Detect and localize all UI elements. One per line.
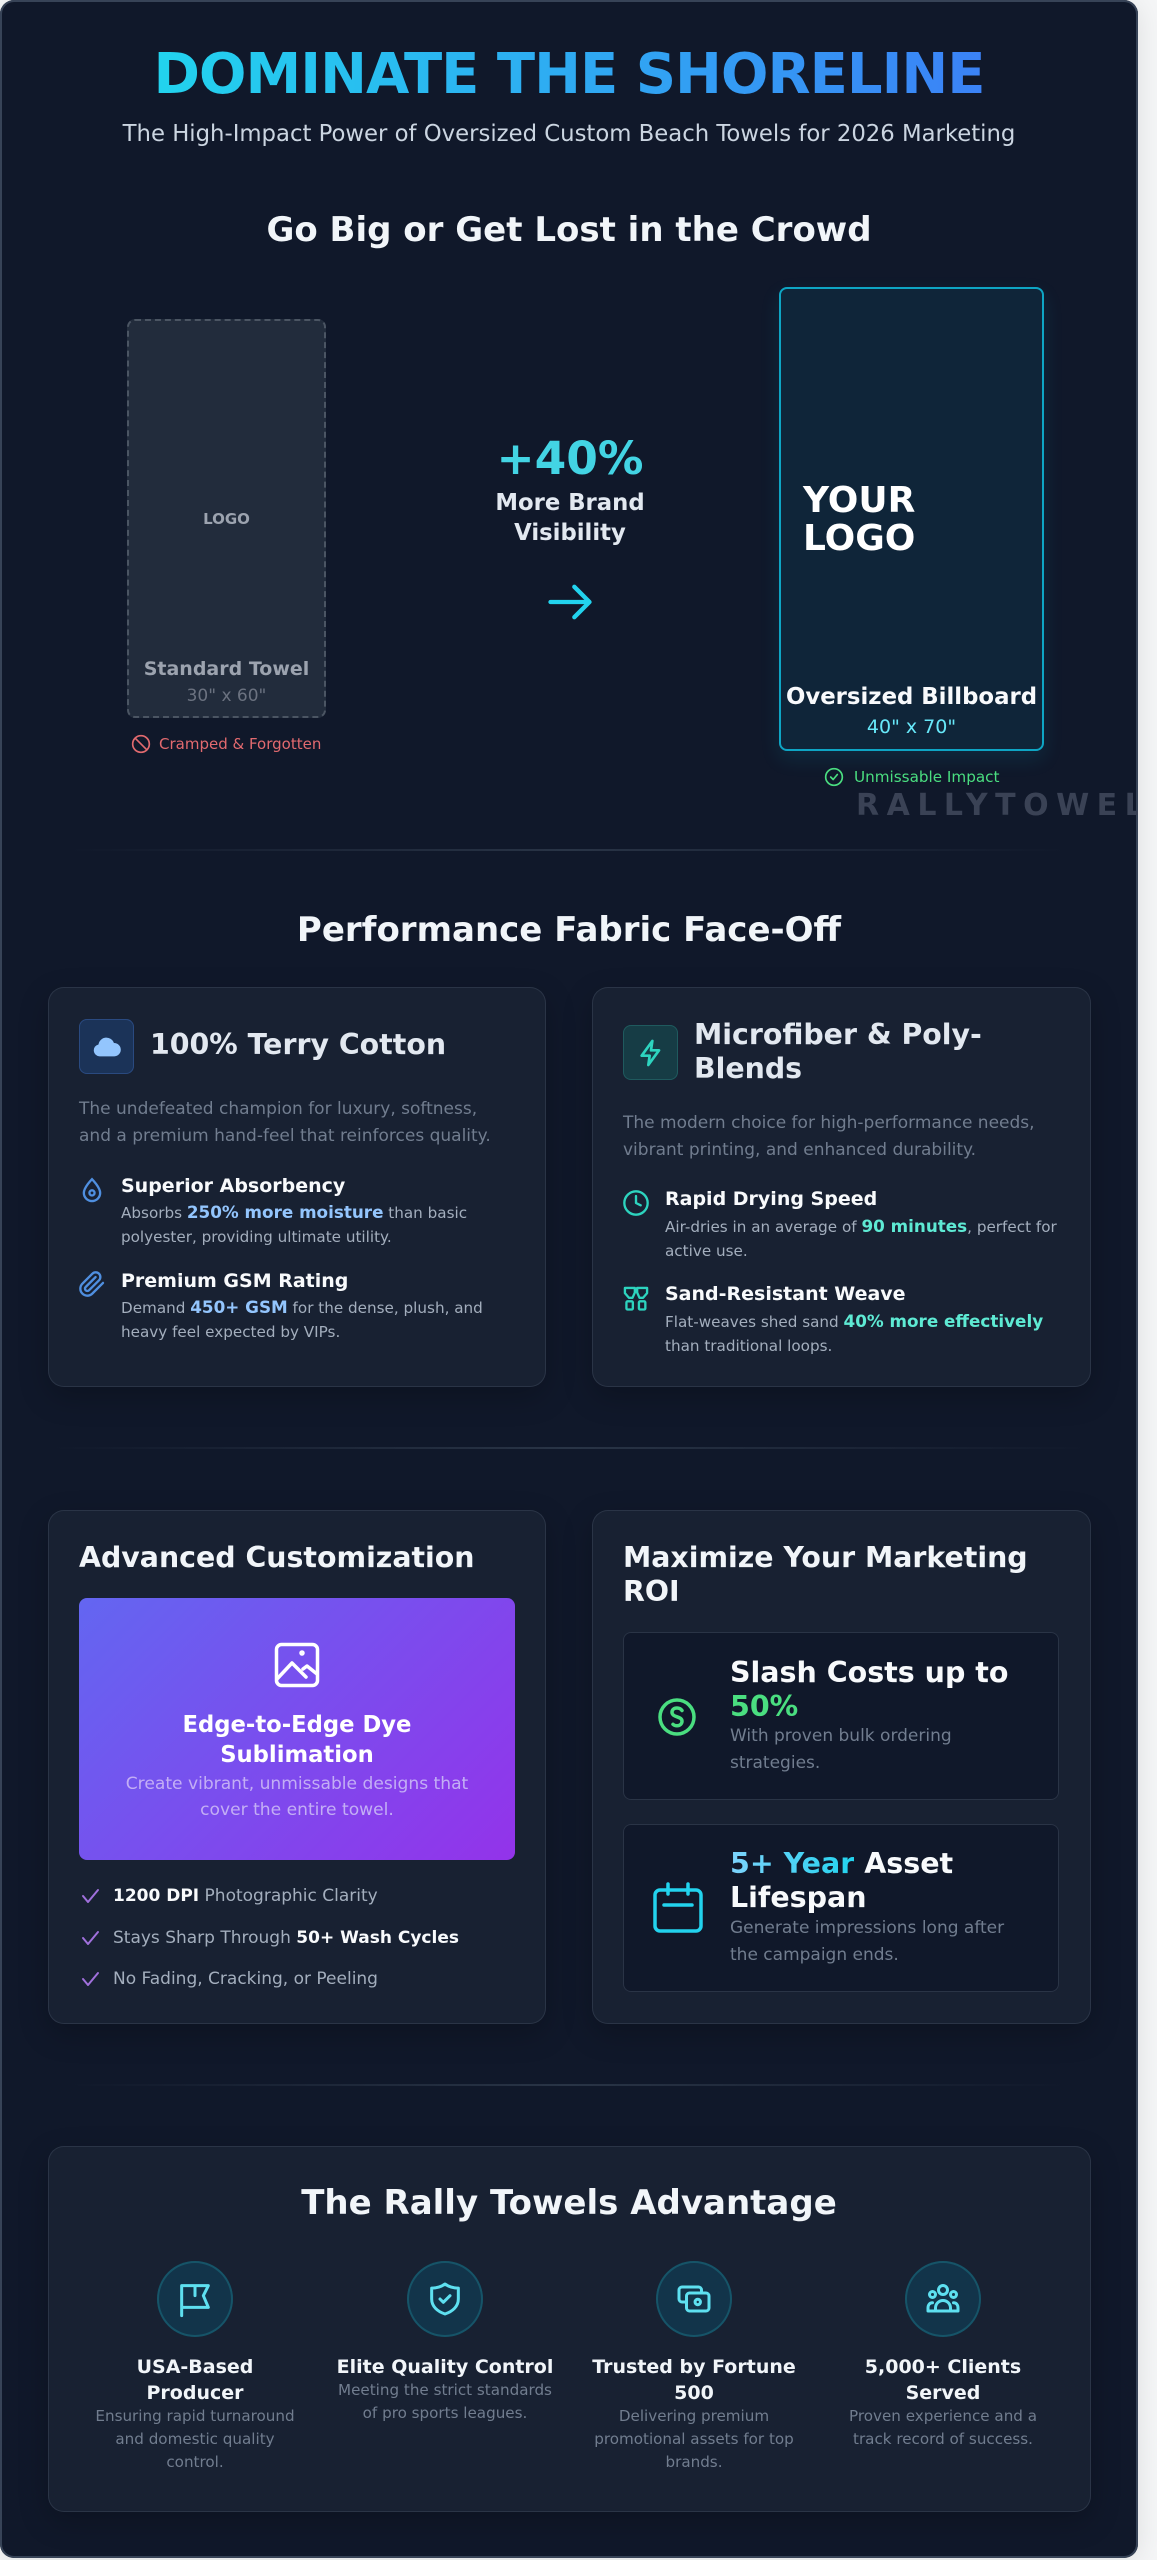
advantage text: of pro sports leagues. xyxy=(363,2404,527,2422)
card heading xyxy=(694,1018,982,1084)
panel: customization xyxy=(48,1510,546,2024)
card description: The undefeated champion for luxury, softness, xyxy=(79,1099,477,1119)
feature text: Demand 450+ GSM for the dense, plush, and xyxy=(121,1297,483,1317)
card heading: Maximize Your Marketing xyxy=(623,1541,1028,1574)
advantage title xyxy=(865,2354,1021,2406)
advantage title: Served xyxy=(906,2382,980,2404)
stat label: Visibility xyxy=(514,520,626,546)
panel: advantage xyxy=(48,2146,1091,2512)
advantage title: Elite Quality Control xyxy=(337,2356,553,2378)
advantage text: Delivering premium xyxy=(619,2407,769,2425)
callout text xyxy=(126,1774,468,1820)
icon: bolt xyxy=(623,1025,678,1080)
stat number: +40% xyxy=(496,432,644,485)
logo label: YOUR xyxy=(803,480,915,521)
callout title xyxy=(183,1712,411,1768)
advantage text xyxy=(594,2405,794,2474)
feature text: polyester, providing ultimate utility. xyxy=(121,1228,392,1246)
advantage: fortune xyxy=(569,2261,819,2491)
towel size: 30" x 60" xyxy=(187,686,266,706)
icon: check circle xyxy=(824,768,844,786)
callout text: Cramped & Forgotten xyxy=(159,735,321,753)
roi text xyxy=(730,1918,1004,1965)
card description xyxy=(622,1113,1035,1160)
heading: go big: Go Big or Get Lost in the Crowd xyxy=(266,210,872,250)
advantage title: 500 xyxy=(674,2382,714,2404)
logo label: LOGO xyxy=(203,510,250,528)
feature title: Sand-Resistant Weave xyxy=(665,1283,906,1305)
checklist xyxy=(82,1886,459,1989)
stat label: More Brand xyxy=(495,490,645,516)
advantage: usa xyxy=(95,2261,295,2471)
towel name: Standard Towel xyxy=(144,658,309,680)
feature: gsm xyxy=(79,1270,483,1341)
panel: terry cotton xyxy=(48,987,546,1387)
icon: weave xyxy=(624,1286,648,1311)
feature text: than traditional loops. xyxy=(665,1337,832,1355)
advantage title: USA-Based xyxy=(137,2356,253,2378)
feature text xyxy=(665,1311,1043,1355)
icon: clock xyxy=(623,1190,649,1216)
advantage text: track record of success. xyxy=(853,2430,1033,2448)
roi card: lifespan xyxy=(623,1824,1059,1992)
feature title: Superior Absorbency xyxy=(121,1175,345,1197)
icon: people xyxy=(905,2261,981,2337)
icon: droplet xyxy=(82,1178,102,1202)
icon: image xyxy=(274,1642,320,1688)
check item 2: Stays Sharp Through 50+ Wash Cycles xyxy=(113,1928,459,1948)
towel size: 40" x 70" xyxy=(867,716,956,738)
callout text: cover the entire towel. xyxy=(200,1800,394,1820)
roi title xyxy=(730,1847,953,1914)
icon: cloud xyxy=(79,1019,134,1074)
roi title xyxy=(730,1656,1008,1723)
feature text: Flat-weaves shed sand 40% more effectively xyxy=(665,1311,1043,1331)
advantage text: control. xyxy=(166,2453,224,2471)
feature title: Premium GSM Rating xyxy=(121,1270,348,1292)
icon: paperclip xyxy=(79,1271,104,1297)
advantage text: brands. xyxy=(665,2453,723,2471)
advantage text: promotional assets for top xyxy=(594,2430,794,2448)
advantage title xyxy=(592,2354,796,2406)
logo label xyxy=(802,480,915,559)
feature: drying xyxy=(623,1188,1057,1260)
advantage title: 5,000+ Clients xyxy=(865,2356,1021,2378)
stat: visibility gain xyxy=(495,432,645,620)
card heading xyxy=(623,1541,1028,1608)
icon: flag xyxy=(157,2261,233,2337)
icon: calendar xyxy=(653,1882,703,1933)
feature text: heavy feel expected by VIPs. xyxy=(121,1323,340,1341)
card description xyxy=(78,1099,491,1146)
roi title: Slash Costs up to xyxy=(730,1656,1008,1689)
arrow xyxy=(548,584,592,620)
feature text xyxy=(121,1202,467,1246)
advantage text: and domestic quality xyxy=(115,2430,275,2448)
card heading: ROI xyxy=(623,1574,680,1608)
icon: shield xyxy=(407,2261,483,2337)
feature: sand weave xyxy=(624,1283,1043,1355)
icon: cash xyxy=(656,2261,732,2337)
advantage title: Producer xyxy=(146,2382,244,2404)
title: DOMINATE THE SHORELINE xyxy=(153,42,985,107)
card description: The modern choice for high-performance needs, xyxy=(623,1113,1035,1133)
check item 3: No Fading, Cracking, or Peeling xyxy=(113,1969,378,1989)
callout text: Create vibrant, unmissable designs that xyxy=(126,1774,468,1794)
callout: unmissable xyxy=(824,768,1000,786)
advantage text: Ensuring rapid turnaround xyxy=(95,2407,295,2425)
feature text: active use. xyxy=(665,1242,748,1260)
feature text: Absorbs 250% more moisture than basic xyxy=(121,1202,467,1222)
roi card: costs xyxy=(623,1632,1059,1800)
roi title: 5+ Year Asset xyxy=(730,1847,953,1880)
icon: dollar xyxy=(658,1698,696,1736)
callout text: Unmissable Impact xyxy=(854,768,999,786)
panel: microfiber xyxy=(592,987,1091,1387)
stat label xyxy=(495,490,645,546)
feature: absorbency xyxy=(82,1175,467,1246)
logo label: LOGO xyxy=(803,518,915,559)
card heading: Advanced Customization xyxy=(79,1541,475,1574)
callout: cramped xyxy=(132,734,321,754)
callout title: Edge-to-Edge Dye xyxy=(183,1712,411,1738)
roi title: 50% xyxy=(730,1690,798,1723)
roi text: Generate impressions long after xyxy=(730,1918,1004,1938)
advantage text xyxy=(95,2407,295,2471)
card heading: Blends xyxy=(694,1052,802,1084)
subtitle: The High-Impact Power of Oversized Custom Beach Towels for 2026 Marketing xyxy=(123,121,1015,147)
panel: oversized towel xyxy=(779,287,1044,751)
feature text: Air-dries in an average of 90 minutes, perfect for xyxy=(665,1216,1057,1236)
advantage: quality xyxy=(320,2261,570,2491)
card description: and a premium hand-feel that reinforces quality. xyxy=(79,1126,491,1146)
card heading: 100% Terry Cotton xyxy=(150,1028,446,1061)
advantage title xyxy=(137,2356,253,2404)
advantage text: Proven experience and a xyxy=(849,2407,1037,2425)
check item 1: 1200 DPI Photographic Clarity xyxy=(113,1886,378,1906)
panel: roi xyxy=(592,1510,1091,2024)
icon: ban xyxy=(132,734,150,754)
towel name: Oversized Billboard xyxy=(786,684,1037,710)
advantage: clients xyxy=(818,2261,1068,2491)
panel: standard towel xyxy=(127,319,326,718)
callout title: Sublimation xyxy=(220,1742,374,1768)
card heading: Microfiber & Poly- xyxy=(694,1018,982,1051)
feature text xyxy=(665,1216,1057,1260)
heading: The Rally Towels Advantage xyxy=(301,2183,837,2223)
roi text: strategies. xyxy=(730,1753,820,1773)
roi text: the campaign ends. xyxy=(730,1945,899,1965)
card description: vibrant printing, and enhanced durability. xyxy=(623,1140,976,1160)
advantage title: Trusted by Fortune xyxy=(592,2356,796,2378)
roi title: Lifespan xyxy=(730,1881,867,1914)
heading: fabric: Performance Fabric Face-Off xyxy=(297,910,841,950)
advantage text: Meeting the strict standards xyxy=(338,2381,552,2399)
advantage text xyxy=(849,2405,1037,2451)
advantage text xyxy=(338,2379,552,2425)
feature title: Rapid Drying Speed xyxy=(665,1188,877,1210)
roi text xyxy=(730,1726,952,1773)
feature text xyxy=(121,1297,483,1341)
dye sublimation callout xyxy=(79,1598,515,1860)
roi text: With proven bulk ordering xyxy=(730,1726,952,1746)
